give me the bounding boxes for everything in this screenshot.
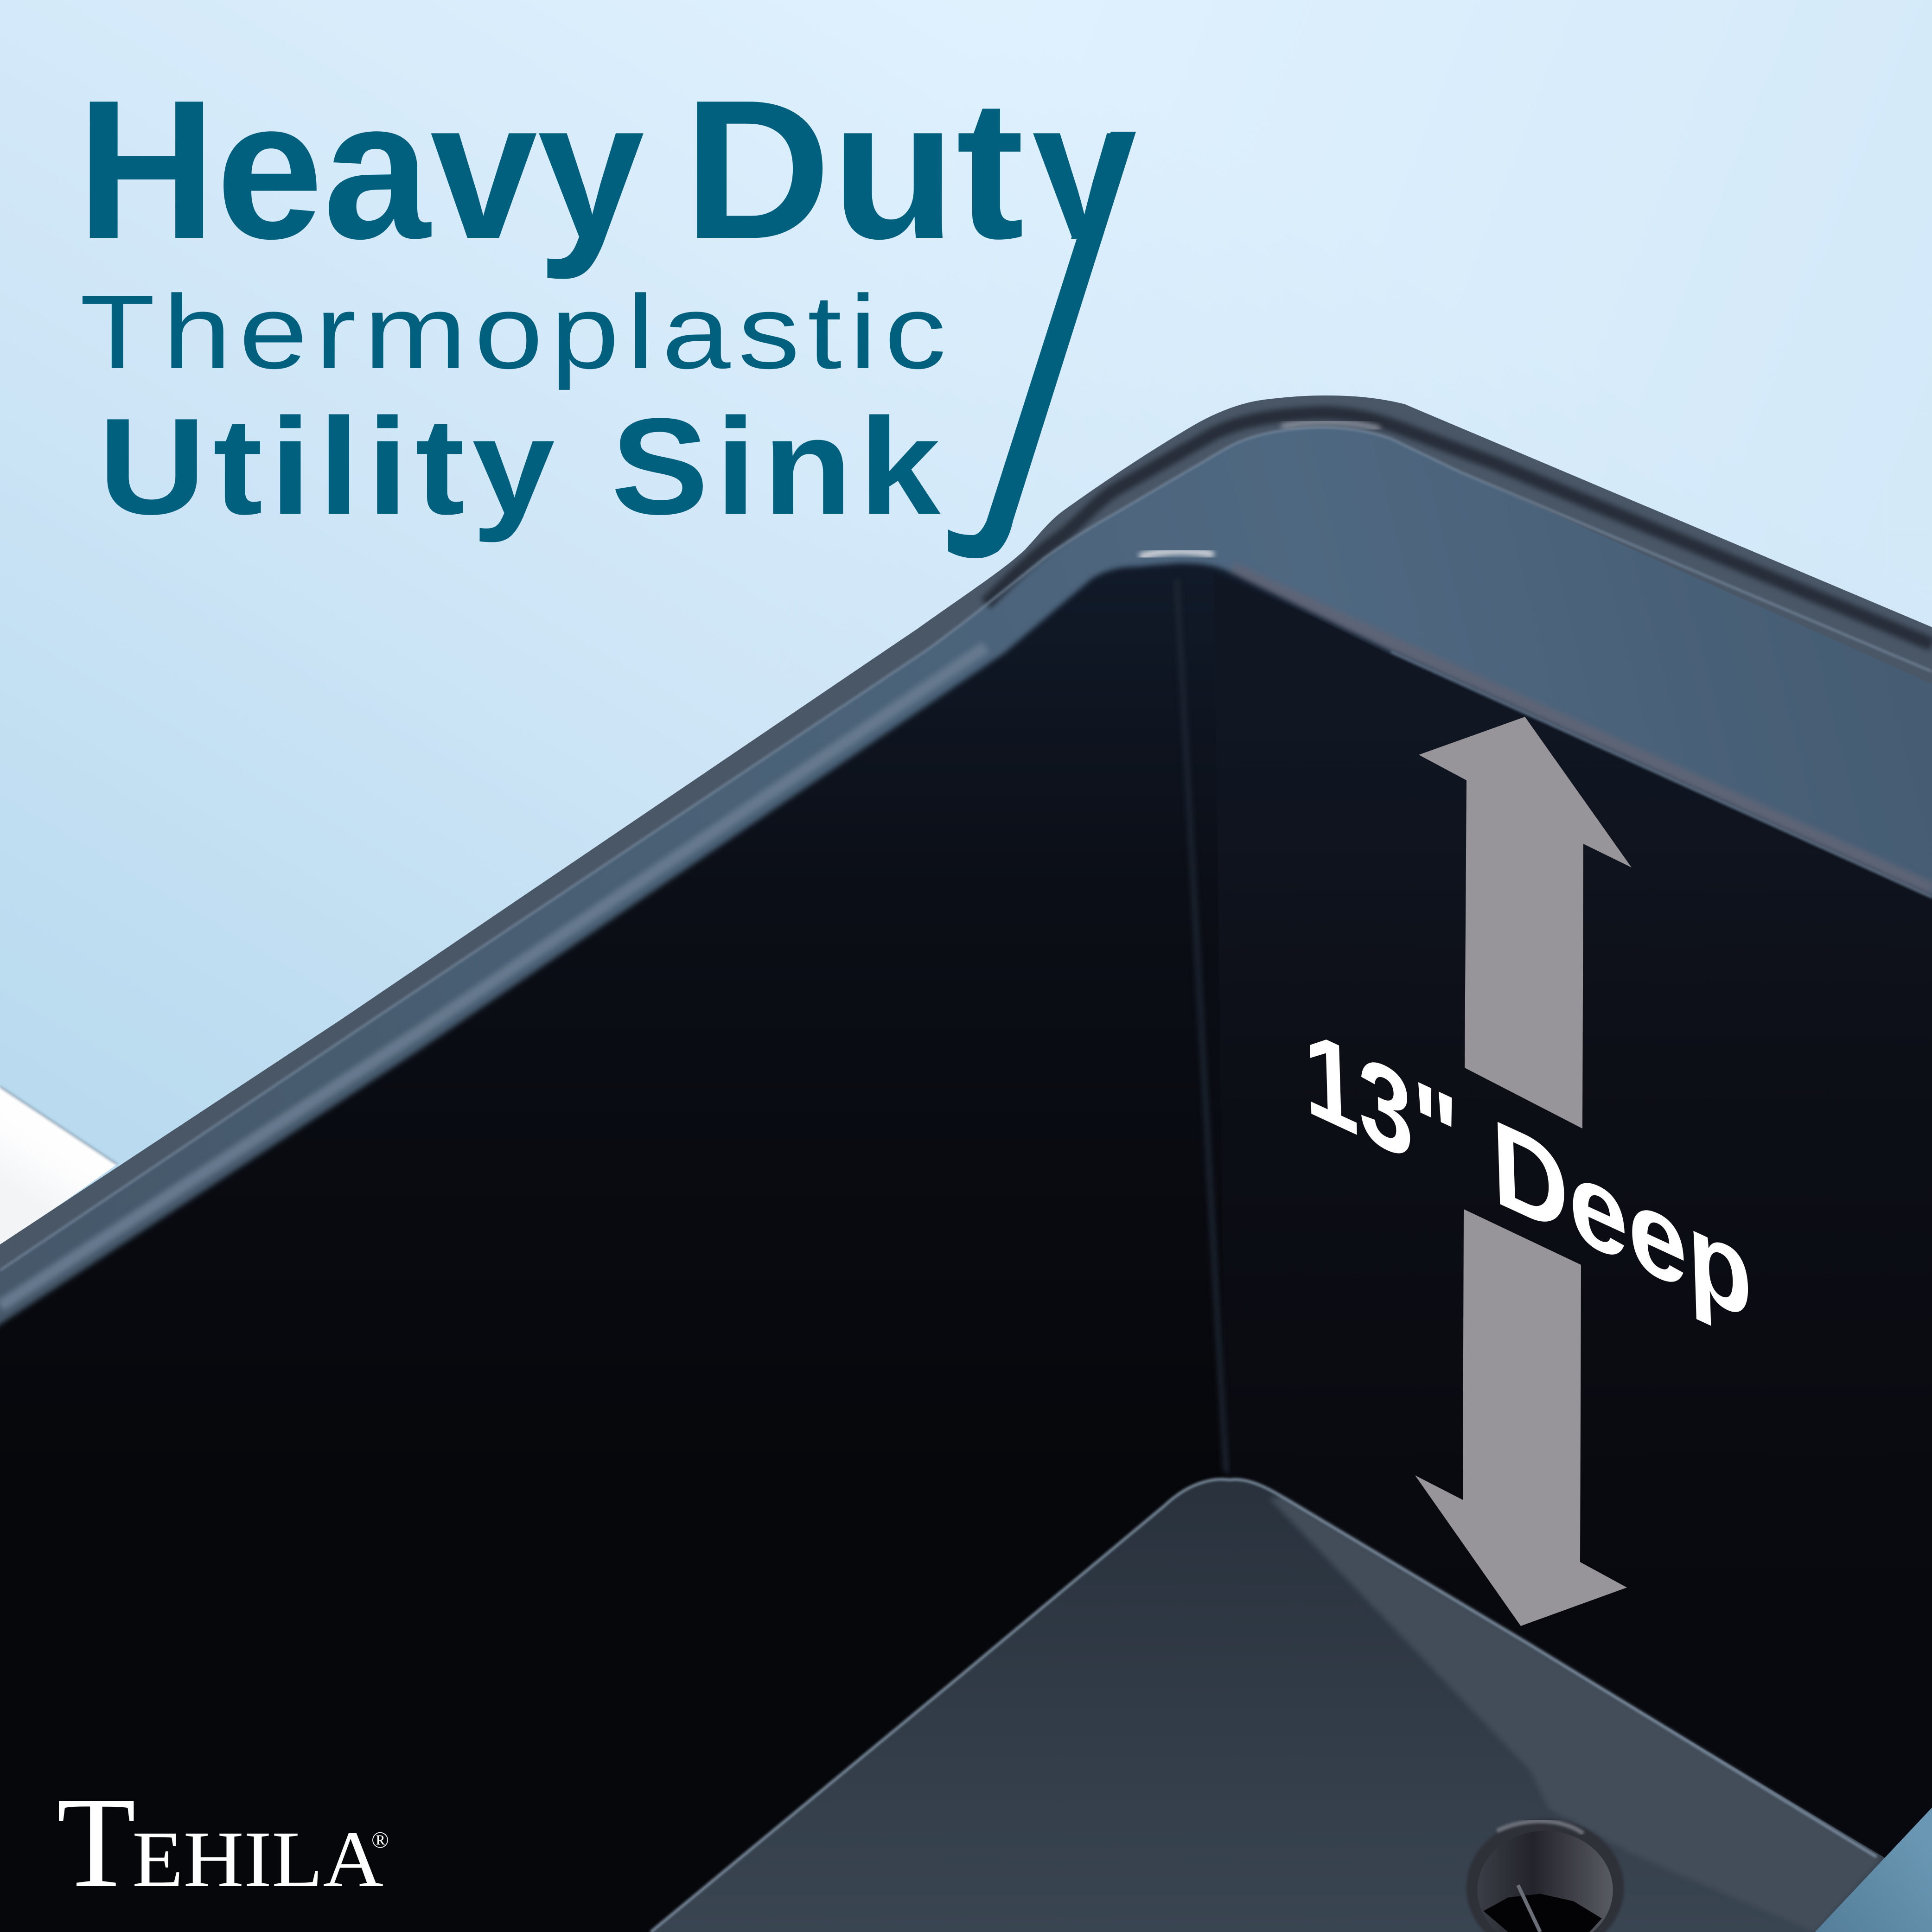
basin floor (650, 1477, 1885, 1932)
arrow: lower half (1415, 1209, 1627, 1626)
heading: Heavy Duty: Dut (683, 59, 1024, 280)
blue faucet band at bottom right (1815, 1808, 1932, 1932)
heading: Heavy Duty: Heavy (77, 59, 646, 281)
logo: Tehila (57, 1770, 389, 1914)
title (77, 59, 1136, 558)
decorative y tail bracket (948, 132, 1136, 558)
subheading: Utility Sink: Sink (611, 389, 947, 543)
subheading: Utility Sink (98, 389, 947, 544)
depth label: Deep (1490, 1093, 1754, 1346)
logo: Tehila: T (57, 1770, 136, 1914)
depth label (1302, 1003, 1754, 1346)
arrow: upper half (1419, 717, 1632, 1129)
subheading: Thermoplastic: Thermoplastic (80, 273, 954, 390)
black basin interior (0, 563, 1932, 1932)
white counter at left (0, 1087, 117, 1247)
heading: Heavy Duty: y (1032, 59, 1136, 281)
logo: Tehila: ® (371, 1827, 389, 1853)
depth arrow (1415, 717, 1632, 1626)
sink rim (0, 395, 1932, 1932)
drain hole (1466, 1818, 1624, 1932)
logo: Tehila: EHILA (132, 1815, 383, 1904)
depth label: 13" (1302, 1003, 1461, 1209)
heading: Heavy Duty (90, 102, 1110, 279)
subheading: Utility Sink: Utility (98, 389, 562, 544)
